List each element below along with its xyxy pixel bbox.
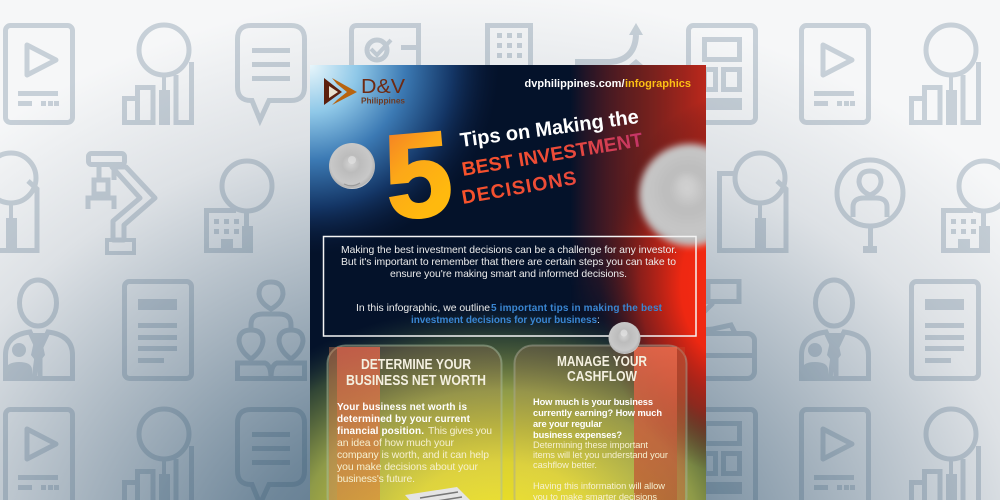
icon: hand with stack xyxy=(706,279,757,381)
intro paragraph: ensure you're making smart and informed decisions. xyxy=(390,269,627,280)
icon: speech bubble xyxy=(238,26,304,120)
card body text: Having this information will allow xyxy=(533,481,665,491)
logo: Philippines xyxy=(361,96,405,106)
panel: cashflow card xyxy=(514,346,686,500)
title line 2: BEST INVESTMENT xyxy=(460,129,644,181)
icon: right blurred coin xyxy=(634,138,706,252)
website url: infographics xyxy=(625,78,691,90)
card body text: cashflow better. xyxy=(533,460,597,470)
card body text xyxy=(533,397,668,500)
card heading xyxy=(346,357,486,389)
card body text: you make decisions about your xyxy=(337,462,479,473)
intro highlight paragraph: : xyxy=(597,315,600,326)
icon: left coin xyxy=(329,143,375,189)
card body text: company is worth, and it can help xyxy=(337,450,489,461)
icon: layout document xyxy=(688,26,756,122)
icon: businessman xyxy=(3,280,75,381)
intro box xyxy=(324,236,696,336)
website url xyxy=(524,79,690,90)
intro paragraph: But it's important to remember that there are certain steps you can take to xyxy=(341,257,676,268)
panel: net worth card xyxy=(328,346,502,500)
logo: D&V xyxy=(361,76,406,98)
card body text: determined by your current xyxy=(337,414,471,425)
card body text: How much is your business xyxy=(533,397,653,407)
icon: magnifier with document left xyxy=(0,153,37,253)
title line 1: Tips on Making the xyxy=(459,106,640,152)
icon: people group xyxy=(238,282,304,378)
intro highlight paragraph: 5 important tips in making the best xyxy=(491,303,663,314)
card body text: This gives you xyxy=(428,426,492,437)
intro paragraph: Making the best investment decisions can be a challenge for any investor. xyxy=(341,245,677,256)
icon: video document right xyxy=(802,26,868,122)
card body text: are your regular xyxy=(533,419,602,429)
icon: magnifier with building xyxy=(204,161,272,253)
icon: checklist xyxy=(349,23,421,65)
card body text: Your business net worth is xyxy=(337,402,467,413)
icon: small coin xyxy=(608,322,640,354)
card body text: business's future. xyxy=(337,474,415,485)
icon: speech bubble bottom xyxy=(238,410,304,500)
website url: dvphilippines.com/ xyxy=(524,78,624,90)
title xyxy=(389,111,642,219)
icon: office building xyxy=(488,26,530,68)
icon: magnifier chart bottom xyxy=(124,409,192,500)
icon: businessman right xyxy=(799,280,871,381)
title line 3: DECISIONS xyxy=(460,167,578,209)
card body text: business expenses? xyxy=(533,430,622,440)
card heading: MANAGE YOUR xyxy=(557,354,647,370)
icon: robotic arm xyxy=(88,154,155,253)
icon: video document xyxy=(6,26,72,122)
icon: magnifier with bar chart xyxy=(124,25,192,125)
icon: magnifier with building right xyxy=(941,161,1000,253)
card body text xyxy=(337,402,492,485)
card heading: CASHFLOW xyxy=(567,369,637,385)
intro highlight paragraph xyxy=(356,303,663,326)
icon: video document bottom right xyxy=(802,410,868,500)
icon: magnifier chart bottom right xyxy=(912,409,978,500)
card body text: Determining these important xyxy=(533,440,648,450)
card heading: BUSINESS NET WORTH xyxy=(346,373,486,389)
panel: infographic poster xyxy=(310,65,741,500)
icon: text document xyxy=(124,282,192,378)
icon: magnifier with person xyxy=(837,160,903,253)
icon: paper document xyxy=(405,487,475,500)
icon: magnifier with bar chart right xyxy=(912,25,978,125)
icon: layout document bottom xyxy=(706,407,758,500)
icon: text document right xyxy=(912,282,978,378)
card body text: items will let you understand your xyxy=(533,450,668,460)
intro paragraph xyxy=(341,245,677,280)
icon: video document bottom xyxy=(6,410,72,500)
icon: growth arrow xyxy=(575,23,643,65)
card body text: an idea of how much your xyxy=(337,438,455,449)
card body text: financial position. xyxy=(337,426,424,437)
icon: logo arrows xyxy=(324,78,357,105)
icon: magnifier with document right xyxy=(720,153,786,253)
logo xyxy=(324,76,406,106)
big number 5: 5 xyxy=(380,107,457,245)
intro highlight paragraph: In this infographic, we outline xyxy=(356,303,490,314)
card heading: DETERMINE YOUR xyxy=(361,357,471,373)
card body text: currently earning? How much xyxy=(533,408,662,418)
intro highlight paragraph: investment decisions for your business xyxy=(411,315,597,326)
card heading xyxy=(557,354,647,385)
